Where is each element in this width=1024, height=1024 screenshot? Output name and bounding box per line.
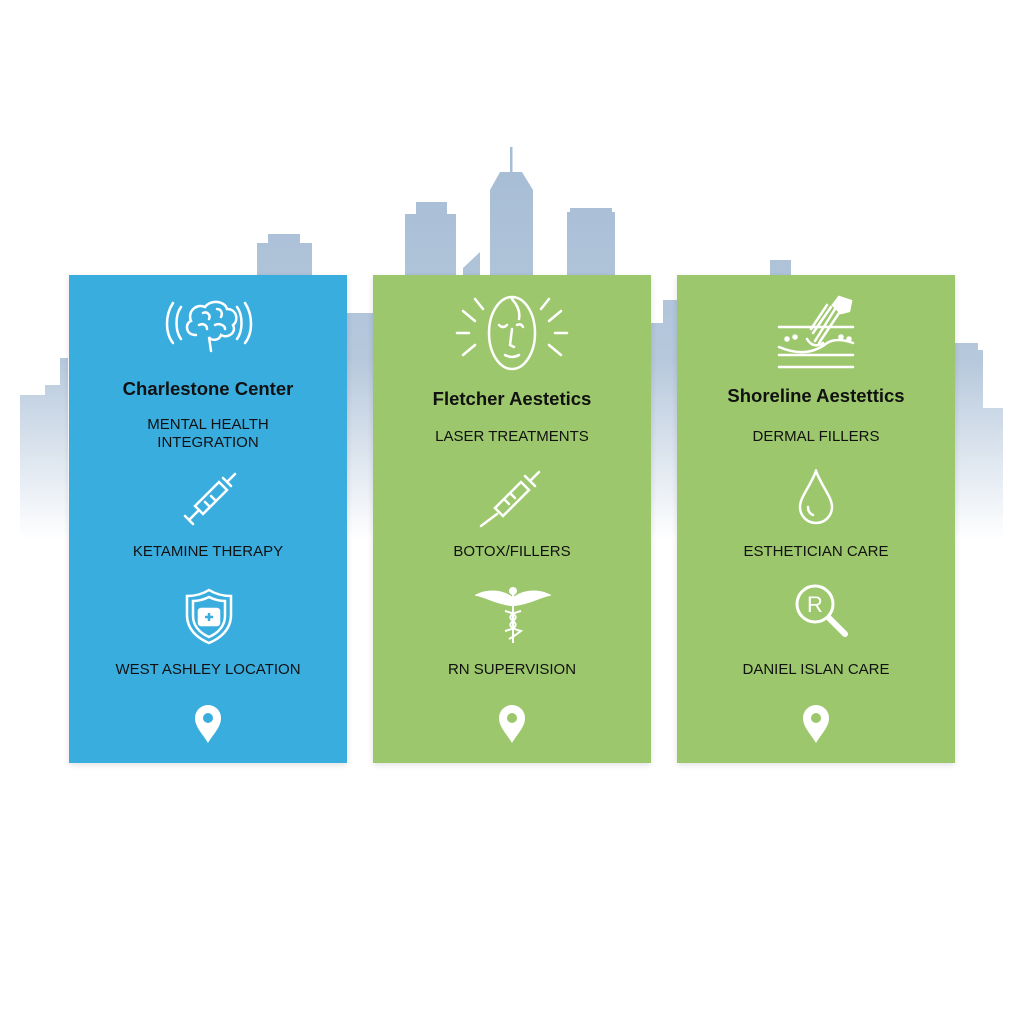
icon: pin xyxy=(499,705,525,743)
item: mental health: INTEGRATION xyxy=(157,434,259,451)
panel: Fletcher Aestetics xyxy=(373,275,651,763)
item: RN: RN SUPERVISION xyxy=(448,661,576,678)
title: Charlestone Center xyxy=(123,378,293,399)
icon: face xyxy=(456,296,568,370)
item: ketamine: KETAMINE THERAPY xyxy=(133,543,283,560)
item: dermal: DERMAL FILLERS xyxy=(752,428,879,445)
icon: syringe xyxy=(184,472,236,526)
icon: pin xyxy=(195,705,221,743)
item: botox: BOTOX/FILLERS xyxy=(453,543,571,560)
item: mental health xyxy=(147,416,269,451)
item: laser: LASER TREATMENTS xyxy=(435,428,589,445)
icon: magnifier: R xyxy=(807,592,823,617)
icon: brain xyxy=(166,300,252,352)
item: esthetician: ESTHETICIAN CARE xyxy=(743,543,889,560)
item: location: WEST ASHLEY LOCATION xyxy=(115,661,301,678)
icon: pin xyxy=(803,705,829,743)
item: daniel: DANIEL ISLAN CARE xyxy=(742,661,890,678)
icon: caduceus xyxy=(475,587,551,643)
panel: Charlestone Center xyxy=(69,275,347,763)
icon: magnifier xyxy=(796,584,848,637)
panel: Shoreline Aestettics xyxy=(677,275,955,763)
icon: syringe xyxy=(480,470,540,528)
item: mental health: MENTAL HEALTH xyxy=(147,416,269,433)
icon: drop xyxy=(798,469,834,524)
title: Fletcher Aestetics xyxy=(433,388,591,409)
title: Shoreline Aestettics xyxy=(727,385,905,406)
icon: skin laser xyxy=(778,296,854,368)
icon: shield xyxy=(186,588,232,644)
